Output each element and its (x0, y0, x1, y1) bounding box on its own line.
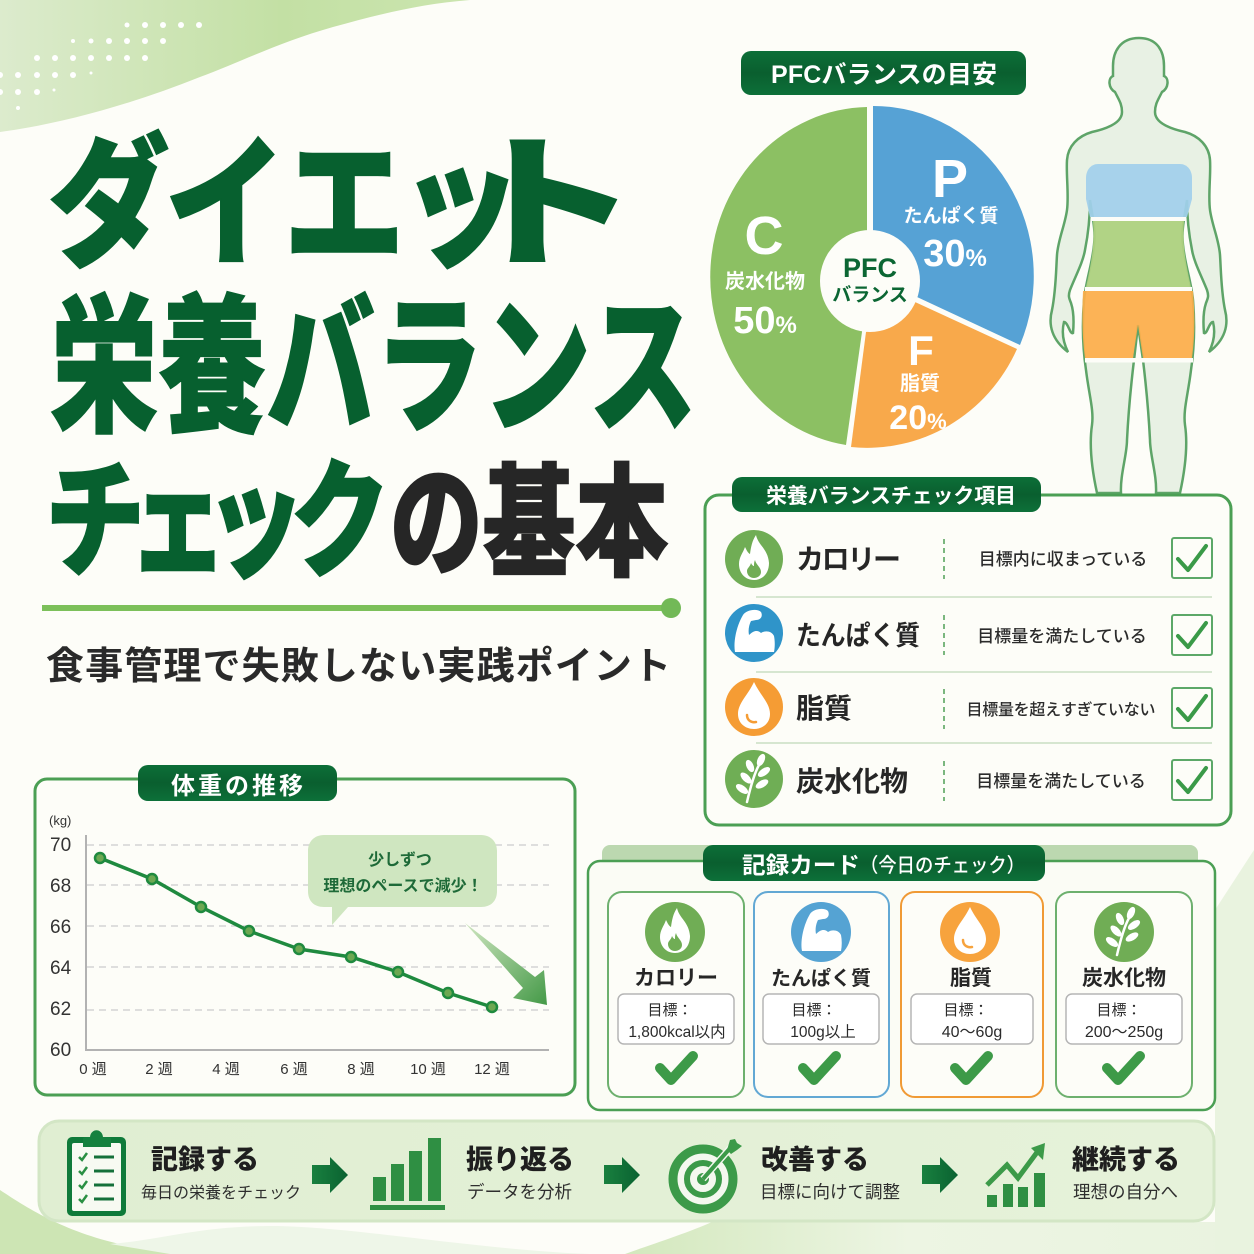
body band: carbohydrate (1086, 221, 1191, 287)
card: fat (901, 892, 1043, 1097)
arrow (312, 1157, 348, 1193)
line chart: 60 (50, 1040, 71, 1061)
step: review: 振り返る (466, 1138, 574, 1177)
line chart: 64 (50, 958, 72, 979)
line chart: 70 (50, 835, 71, 856)
heading: weight trend: 体重の推移 (171, 773, 303, 800)
heading: record card: 記録カード (742, 852, 860, 878)
title (45, 89, 697, 604)
line chart: 62 (50, 999, 71, 1020)
step: record (141, 1138, 301, 1203)
panel: nutrition check items (705, 477, 1231, 825)
icon: target (673, 1139, 742, 1209)
heading: weight trend (138, 765, 337, 801)
slice: fat 20% (851, 302, 1017, 448)
card: protein (754, 892, 889, 1097)
card: carbohydrate (1056, 892, 1192, 1097)
panel: record card (588, 845, 1215, 1110)
title underline (42, 598, 681, 618)
line chart: 0 週 (79, 1061, 107, 1078)
card: protein: 100g以上 (790, 1023, 856, 1041)
card: fat: 脂質 (950, 962, 992, 992)
card: fat: 目標： (943, 1002, 989, 1019)
slice: carbohydrate 50%: 50% (733, 300, 797, 342)
card: calories: 1,800kcal以内 (628, 1023, 726, 1041)
arrow: downward trend (465, 923, 547, 1005)
body silhouette (1051, 38, 1226, 493)
row: protein: たんぱく質 (796, 614, 920, 653)
heading: record card: （今日のチェック） (860, 854, 1025, 877)
heading: record card (703, 845, 1045, 881)
panel: action steps (39, 1121, 1214, 1221)
slice: protein 30% (873, 106, 1034, 345)
card: calories: 目標： (647, 1002, 693, 1019)
slice: carbohydrate 50%: 炭水化物 (725, 270, 805, 293)
heading: PFC balance: PFCバランスの目安 (771, 61, 997, 89)
line chart: 2 週 (145, 1061, 173, 1078)
slice: fat 20%: 20% (889, 399, 947, 437)
pie chart: PFC (710, 106, 1034, 448)
row: fat: 目標量を超えすぎていない (966, 696, 1156, 720)
card: protein: たんぱく質 (771, 962, 871, 991)
slice: protein 30%: P (932, 149, 968, 209)
title: ダイエッ (48, 89, 521, 295)
body band: protein (1086, 164, 1192, 217)
line chart: 10 週 (410, 1061, 446, 1078)
heading: PFC balance (741, 51, 1026, 95)
heading: check items: 栄養バランスチェック項目 (766, 485, 1016, 508)
step: record: 毎日の栄養をチェック (141, 1179, 301, 1203)
card: carbohydrate: 目標： (1096, 1002, 1142, 1019)
line chart (49, 813, 549, 1078)
callout (308, 835, 497, 925)
step: review: データを分析 (467, 1179, 572, 1204)
callout: 少しずつ (368, 846, 432, 870)
slice: protein 30%: たんぱく質 (903, 205, 999, 227)
slice: carbohydrate 50% (710, 107, 867, 445)
step: improve (760, 1138, 900, 1204)
step: continue: 理想の自分へ (1073, 1179, 1178, 1204)
title: チェック (45, 419, 390, 604)
slice: carbohydrate 50%: C (744, 206, 784, 266)
card: carbohydrate: 炭水化物 (1082, 962, 1166, 992)
body band: fat (1082, 291, 1194, 358)
line chart: 66 (50, 917, 71, 938)
icon: growth chart (987, 1143, 1045, 1207)
title: の基本 (390, 425, 668, 602)
step: record: 記録する (151, 1138, 259, 1177)
step: improve: 改善する (761, 1138, 869, 1177)
step: continue: 継続する (1072, 1138, 1180, 1177)
panel: weight trend (35, 765, 575, 1095)
row: carbohydrate: 炭水化物 (796, 760, 908, 800)
subtitle: 食事管理で失敗しない実践ポイント (46, 635, 671, 690)
title: ト (459, 90, 637, 295)
row: carbohydrate (725, 750, 1212, 808)
line chart: (kg) (49, 813, 71, 828)
line chart: 68 (50, 876, 71, 897)
arrow (922, 1157, 958, 1193)
card: protein: 目標： (791, 1002, 837, 1019)
card: fat: 40～60g (942, 1024, 1002, 1041)
row: protein (725, 604, 1212, 662)
pie centre label (820, 230, 920, 332)
row: fat (725, 678, 1212, 736)
callout: 理想のペースで減少！ (323, 872, 483, 896)
card: carbohydrate: 200～250g (1085, 1024, 1163, 1041)
row: calories: カロリー (796, 538, 901, 578)
title: 栄養バランス (50, 247, 697, 464)
step: continue (1072, 1138, 1180, 1204)
row: calories: 目標内に収まっている (979, 545, 1147, 570)
heading: check items (732, 477, 1041, 512)
icon: bar chart (370, 1138, 445, 1210)
step: improve: 目標に向けて調整 (760, 1179, 900, 1204)
card: calories (608, 892, 744, 1097)
slice: protein 30%: 30% (923, 233, 987, 275)
line chart: 12 週 (474, 1061, 510, 1078)
row: carbohydrate: 目標量を満たしている (976, 767, 1146, 792)
line chart: 4 週 (212, 1061, 240, 1078)
pie centre label: バランス (832, 280, 908, 307)
pie centre label: PFC (843, 253, 897, 283)
line chart: 6 週 (280, 1061, 308, 1078)
step: review (466, 1138, 574, 1204)
row: calories (725, 530, 1212, 588)
row: fat: 脂質 (796, 687, 852, 727)
line chart: 8 週 (347, 1061, 375, 1078)
row: protein: 目標量を満たしている (977, 622, 1147, 647)
arrow (604, 1157, 640, 1193)
icon: clipboard (67, 1130, 126, 1216)
slice: fat 20%: 脂質 (900, 372, 940, 395)
card: calories: カロリー (634, 962, 718, 992)
slice: fat 20%: F (908, 327, 934, 374)
